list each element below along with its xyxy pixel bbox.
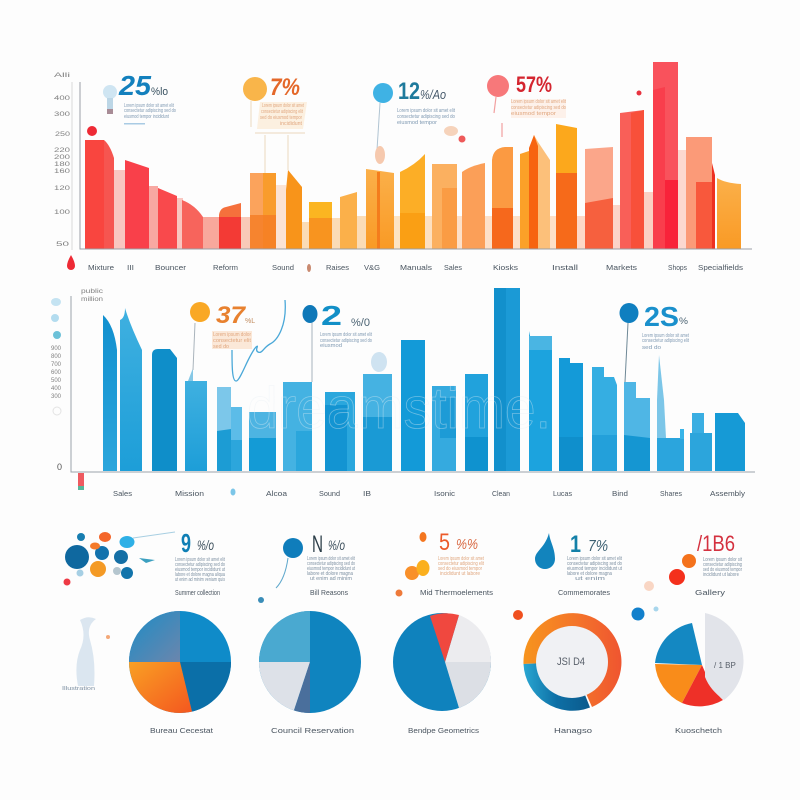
slice: orange (129, 662, 192, 713)
curve line (232, 300, 285, 381)
ring segment: blue (524, 662, 590, 711)
description: consectetur adipiscing sed do (307, 561, 355, 567)
bar 18 right (631, 110, 644, 249)
y axis decorations: blue chart: 800 (51, 353, 61, 360)
y axis decorations: blue chart: 300 (51, 393, 61, 400)
description: Lorem ipsum dolor sit amet elit (124, 103, 174, 109)
bar 8 (309, 202, 332, 249)
bar 3 (158, 188, 177, 249)
description: consectetur adipiscing (703, 562, 742, 568)
description (511, 99, 566, 118)
bar 2 (120, 308, 142, 471)
watermark: dreamstime. (247, 376, 551, 441)
bar 18 sliver (680, 429, 684, 439)
x axis labels: top chart: Bouncer (155, 263, 187, 272)
x axis labels: top chart: Sales (444, 263, 462, 272)
slice: blue (655, 623, 702, 665)
bar 17 lower (585, 198, 613, 249)
bar 1 right part (104, 140, 114, 249)
x axis labels: blue chart: Alcoa (266, 489, 288, 498)
small red dot (636, 90, 642, 96)
bar 18 spike (657, 355, 666, 438)
pie labels: Bendpe Geometrics (408, 726, 479, 735)
bar 20 (686, 137, 712, 249)
description: Lorem ipsum dolor sit amet elit (567, 556, 622, 562)
unit: % (679, 316, 688, 326)
description: eiusmod (320, 343, 342, 349)
description: consectetur adipiscing sed do (175, 562, 225, 568)
value: 12 (398, 78, 420, 105)
bar 15 lower (559, 437, 583, 471)
bar 19 inner (653, 87, 665, 249)
value: 1 (570, 531, 581, 558)
bar 11 lower (440, 398, 456, 438)
unit: %L (245, 318, 255, 325)
description: consectetur adipiscing elit (438, 561, 484, 567)
orange beads (396, 532, 430, 596)
description: eiusmod tempor incididunt ut (307, 566, 355, 572)
description: consectetur adipiscing sed do (397, 114, 455, 120)
slice: steel (294, 662, 310, 713)
balloon (243, 77, 267, 101)
icon: light bulb (103, 85, 117, 114)
x axis labels: top chart (88, 263, 743, 272)
bar 19 (653, 62, 678, 249)
bar 12 (465, 374, 488, 471)
y axis labels: top chart: 250 (55, 131, 71, 138)
description: Lorem ipsum dolor sit (703, 557, 742, 563)
bar 17 (585, 147, 613, 249)
icon: small pin (307, 264, 311, 272)
bar 10 (401, 340, 425, 471)
bar 6 lower (250, 215, 276, 249)
slice: grey (259, 662, 310, 710)
description: eiusmod tempor (397, 120, 437, 126)
pie labels: Bureau Cecestat (150, 726, 214, 735)
y axis decorations: blue chart (51, 298, 62, 472)
icon: blue bead (230, 488, 236, 496)
decorative beads (106, 606, 658, 639)
bar 18 (620, 110, 644, 249)
x axis labels: blue chart: Lucas (553, 489, 572, 498)
pie chart 5 (655, 613, 744, 706)
x axis labels: blue chart: Bind (612, 489, 628, 498)
bar 14 (529, 331, 552, 471)
bar 7 (283, 382, 312, 471)
description: eiusmod tempor (511, 111, 556, 117)
pie labels: Council Reservation (271, 726, 354, 735)
description (438, 556, 484, 577)
slice: red (682, 665, 723, 706)
y axis decorations: blue chart: 700 (51, 361, 61, 368)
unit: %/o (328, 537, 345, 553)
description: consectetur adipiscing sed do (567, 561, 622, 567)
description: eiusmod tempor incididunt (124, 114, 169, 120)
bar 10 divider (377, 172, 380, 249)
x axis labels: blue chart: Mission (175, 489, 204, 498)
ring value: JSI D4 (557, 656, 585, 668)
bar 5 (217, 387, 231, 471)
description (703, 557, 742, 578)
y axis decorations: blue chart: 500 (51, 377, 61, 384)
value: 37 (216, 302, 247, 329)
bar 8 (325, 392, 355, 471)
pie chart 2 (259, 611, 361, 713)
bar 18 (657, 438, 684, 471)
callout: 25 percent (103, 70, 176, 124)
pie labels (150, 726, 722, 735)
unit: %% (456, 536, 478, 553)
ribbon illustration: Illustration (62, 686, 95, 692)
description: Lorem ipsum dolor sit amet elit (320, 332, 372, 338)
description: sed do (642, 345, 661, 351)
bar 16 lower (592, 435, 617, 471)
unit: %/o (197, 537, 214, 553)
blue balloon (620, 303, 638, 323)
unit: 7% (588, 538, 608, 555)
x axis labels: top chart: Manuals (400, 263, 432, 272)
pale bead (371, 352, 387, 372)
description panel: consectetur adipiscing elit (261, 109, 303, 115)
description: consectetur adipiscing sed do (124, 108, 176, 114)
bar 20 sliver (712, 163, 715, 249)
bar 8 lower (325, 405, 347, 471)
bar 6 lower (249, 438, 276, 471)
description: consectetur adipiscing sed do (320, 338, 372, 344)
y axis labels: top chart (54, 72, 71, 248)
value: 9 (181, 528, 191, 558)
description: labore et dolore magna (307, 571, 354, 577)
bar 20 (715, 413, 745, 471)
balloon (487, 75, 509, 97)
description: Lorem ipsum dolor sit amet elit (511, 99, 566, 105)
orange balloon (190, 302, 210, 322)
description: labore et dolore magna (567, 571, 613, 577)
bar 10 (366, 169, 394, 249)
bar 17 lower (624, 435, 650, 471)
description: sed do (213, 344, 229, 350)
bar 16 lower (556, 173, 577, 249)
bar 7 lower (296, 431, 312, 471)
balloon (535, 533, 555, 569)
bar 12 (432, 164, 457, 249)
bar 6 (250, 173, 263, 249)
bar 17 (624, 382, 650, 471)
x axis labels: top chart: Mixture (88, 263, 114, 272)
red bead (669, 569, 685, 585)
description panel: sed do eiusmod tempor (260, 115, 302, 121)
description: Lorem ipsum dolor (213, 332, 251, 338)
y axis decorations: blue chart: 0 (57, 462, 62, 472)
axis title: blue chart: public (81, 288, 104, 295)
bar 13 (494, 288, 520, 471)
description: Lorem ipsum dolor sit amet elit (175, 557, 225, 563)
bar 13 left (494, 288, 506, 471)
slice: orange (655, 664, 702, 703)
pie chart 1 (129, 611, 231, 713)
ring segment: orange (523, 613, 621, 707)
peach bead (644, 581, 654, 591)
y axis labels: top chart: 120 (54, 185, 71, 192)
x axis labels: top chart: III (127, 263, 134, 272)
bubble cluster (64, 532, 175, 586)
bar 15 (559, 358, 583, 471)
description: labore et dolore magna aliqua (175, 572, 226, 578)
description: sed do eiusmod tempor (438, 566, 482, 572)
small dot (258, 597, 264, 603)
unit: %/Ao (420, 87, 446, 102)
slice: red (430, 613, 459, 662)
bar 4 sliver (188, 368, 193, 381)
bar 5 lower (217, 429, 231, 471)
callout: second percent (258, 531, 355, 603)
bar 14 (492, 147, 513, 249)
ribbon illustration (62, 617, 96, 692)
callout: 12 percent (373, 78, 466, 164)
y axis decorations: blue chart: 400 (51, 385, 61, 392)
bar 4 (185, 381, 207, 471)
pie labels: Kuoschetch (675, 726, 722, 735)
bar 13 (462, 163, 485, 249)
bar 7 (286, 170, 302, 249)
x axis labels: blue chart: IB (363, 489, 371, 498)
y axis labels: top chart: 300 (54, 111, 71, 118)
callout: 1B6 (644, 531, 742, 597)
description (307, 556, 355, 582)
slice: teal (259, 611, 310, 662)
bar 19 (692, 413, 704, 435)
stem (625, 323, 628, 382)
description (212, 331, 252, 350)
value: N (312, 531, 323, 558)
description (175, 557, 226, 583)
x axis labels: top chart: Raises (326, 263, 349, 272)
y axis labels: top chart: 100 (54, 209, 71, 216)
description: Lorem ipsum dolor sit amet (438, 556, 484, 562)
balloon (373, 83, 393, 103)
x axis labels: top chart: Kiosks (493, 263, 518, 272)
y axis labels: top chart: Alli (54, 72, 70, 79)
bar 16 (592, 367, 617, 471)
description panel: Lorem ipsum dolor sit amet (262, 103, 304, 109)
slice: light grey (445, 615, 491, 662)
pale spacer bars (114, 150, 686, 249)
description (642, 333, 689, 351)
marker: red and green tab (78, 473, 84, 490)
x axis labels: blue chart: Clean (492, 489, 510, 498)
slice: grey (445, 662, 491, 708)
bar 19 lower (690, 433, 712, 471)
ring centre (536, 626, 608, 698)
x axis labels: blue chart (113, 489, 745, 498)
description: incididunt ut labore (703, 572, 739, 578)
x axis labels: blue chart: Isonic (434, 489, 455, 498)
y axis decorations: blue chart: 900 (51, 345, 61, 352)
bar 5 right (231, 407, 242, 471)
icon: red drop (67, 255, 75, 270)
bar 1 (85, 140, 104, 249)
bar 5 (219, 203, 241, 249)
axis lines: top chart (72, 82, 752, 250)
bar 2 (125, 160, 149, 249)
x axis labels: blue chart: Sales (113, 489, 132, 498)
bar 11 (432, 386, 456, 471)
description: eiusmod tempor incididunt ut (567, 566, 622, 572)
description: consectetur elit (213, 338, 251, 344)
stem (377, 103, 380, 150)
bar 11 (400, 154, 425, 249)
y axis labels: top chart: 220 (54, 147, 71, 154)
slice: dark blue (180, 662, 231, 712)
y axis labels: top chart: 160 (54, 168, 71, 175)
stem (193, 323, 195, 370)
axis lines: blue chart (71, 296, 755, 472)
bar 5 lower (219, 217, 241, 249)
description (397, 108, 455, 126)
y axis labels: top chart: 400 (54, 95, 71, 102)
bar 9 (363, 374, 392, 471)
description: Lorem ipsum dolor sit amet elit (397, 108, 455, 114)
description: sed do eiusmod tempor (703, 567, 742, 573)
x axis labels: top chart: Shops (668, 263, 687, 272)
bar 1 (103, 315, 117, 471)
bar 14 top (529, 336, 552, 350)
bar 3 (152, 349, 177, 471)
bar 6 right part (263, 173, 276, 249)
balloon (283, 538, 303, 558)
x axis labels: blue chart: Shares (660, 489, 682, 498)
callout: 5 percent (396, 529, 493, 597)
y axis labels: top chart: 200 (54, 154, 71, 161)
x axis labels: top chart: Install (552, 263, 578, 272)
bar 9 (340, 192, 357, 249)
callout: 37 percent (190, 302, 255, 370)
callout: 2 percent (302, 300, 372, 382)
description: ut enim ad minim veniam quis (175, 577, 225, 583)
description panel: incididunt (280, 121, 302, 127)
bar 20 lower (696, 182, 712, 249)
bar 6 (249, 412, 276, 471)
red bead (458, 136, 466, 142)
bar 9 lower (363, 417, 392, 471)
pie chart 3 (393, 613, 491, 711)
axis title: blue chart (81, 288, 104, 303)
x axis labels: top chart: V&G (364, 263, 380, 272)
x axis labels: top chart: Markets (606, 263, 637, 272)
description (124, 103, 176, 124)
slice: grey (705, 613, 744, 700)
bar 8 lower (309, 218, 332, 249)
bar 11 lower (400, 213, 425, 249)
bar 16 (556, 124, 577, 249)
description: consectetur adipiscing sed do (511, 105, 566, 111)
description: consectetur adipiscing elit (642, 338, 689, 344)
callout: 57 percent (487, 72, 566, 137)
value: 7% (270, 74, 300, 101)
description: incididunt ut labore (440, 571, 480, 577)
x axis labels: top chart: Sound (272, 263, 294, 272)
callout: 17 percent (535, 531, 622, 597)
description (320, 332, 372, 349)
leader line (251, 101, 305, 173)
bar 14 lower (492, 208, 513, 249)
unit: %/0 (351, 317, 370, 329)
unit: %lo (151, 86, 168, 98)
callout: bubbles and 9 percent (64, 528, 226, 597)
bar 21 (717, 178, 741, 249)
bar 15 (520, 135, 550, 249)
blue balloon (302, 305, 318, 323)
red dot (87, 126, 97, 136)
stem (494, 97, 502, 137)
callout: 2S percent (620, 301, 689, 382)
bar 4 (182, 200, 203, 249)
label: Commemorates (558, 588, 610, 597)
axis title: blue chart: million (81, 296, 103, 303)
x axis labels: top chart: Reform (213, 263, 238, 272)
bar chart: blue (103, 288, 745, 471)
bar 12 lower (465, 437, 488, 471)
value: 2S (644, 301, 679, 332)
stem (276, 558, 288, 588)
x axis labels: blue chart: Assembly (710, 489, 745, 498)
pie labels: Hanagso (554, 726, 592, 735)
ring chart (523, 613, 621, 711)
peach tag (444, 126, 458, 136)
bar 19 lower (665, 180, 678, 249)
value: 5 (439, 529, 450, 556)
label: Gallery (695, 588, 725, 597)
y axis decorations: blue chart: 600 (51, 369, 61, 376)
y axis labels: top chart: 50 (56, 241, 70, 248)
bar chart: red and orange (85, 62, 741, 249)
callout: 7 percent (243, 74, 307, 173)
pie value: / 1 BP (714, 661, 736, 670)
orange bead (682, 554, 696, 568)
description: ut enim (575, 576, 606, 582)
label: Bill Reasons (310, 588, 348, 597)
y axis labels: top chart: 180 (54, 161, 71, 168)
x axis labels: top chart: Specialfields (698, 263, 743, 272)
stem (311, 323, 313, 382)
value: 2 (321, 300, 342, 331)
bar 15 peak (529, 135, 538, 249)
bar 15 left (520, 151, 529, 249)
description: Lorem ipsum dolor sit amet elit (307, 556, 355, 562)
value: 25 (118, 70, 151, 101)
description (567, 556, 622, 582)
description: Lorem ipsum dolor sit amet (642, 333, 689, 339)
description: ut enim ad minim (310, 576, 352, 582)
description panel (257, 102, 307, 129)
peach bead (375, 146, 385, 164)
bar 5 lower right (231, 440, 242, 471)
bar 12 lower (442, 188, 457, 249)
value: /1B6 (697, 531, 735, 556)
label: Mid Thermoelements (420, 588, 493, 597)
value: 57% (516, 72, 552, 97)
slice: steel blue (129, 611, 180, 662)
description: eiusmod tempor incididunt ut (175, 567, 225, 573)
label: Summer collection (175, 588, 220, 597)
x axis labels: blue chart: Sound (319, 489, 340, 498)
